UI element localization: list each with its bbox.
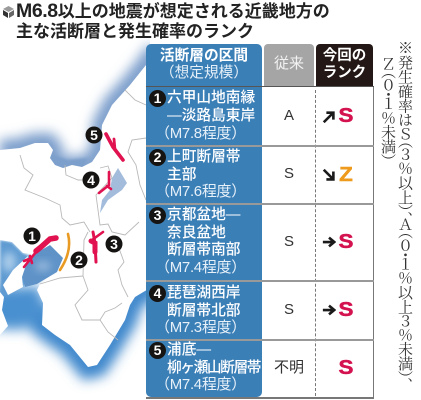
fault 4 xyxy=(99,172,111,193)
table: （M7.8程度） xyxy=(155,125,246,142)
header: 従来: 従来 xyxy=(274,55,304,72)
rank S: S xyxy=(339,231,353,253)
header: 活断層の区間: 活断層の区間 xyxy=(160,48,248,64)
number 2: 2 xyxy=(154,149,161,165)
fault 3 xyxy=(91,232,103,262)
badge 4 xyxy=(82,172,100,188)
Wakasa bay xyxy=(46,152,88,170)
number 2 xyxy=(149,149,166,166)
table right border xyxy=(373,86,374,398)
number 4: 4 xyxy=(154,285,161,301)
table: （M7.4程度） xyxy=(155,376,246,393)
rank S: S xyxy=(339,299,353,321)
Shikoku xyxy=(0,292,8,335)
Osaka bay xyxy=(22,245,63,287)
row 3 name: 京都盆地― xyxy=(167,207,240,223)
arrow down xyxy=(322,168,335,181)
table: ―淡路島東岸 xyxy=(167,108,255,124)
row 5 previous: 不明 xyxy=(274,359,304,376)
header: 活断層の区間: （想定規模） xyxy=(160,65,248,81)
number 1 xyxy=(149,90,166,107)
row 1 previous: A xyxy=(284,107,294,124)
title icon: cube xyxy=(3,6,14,18)
arrow right xyxy=(322,236,336,248)
number 3 xyxy=(149,207,166,224)
row 3 previous: S xyxy=(284,233,294,250)
arrow right xyxy=(322,304,336,316)
row 2 name: 上町断層帯 xyxy=(167,149,240,165)
title xyxy=(16,0,330,41)
badge 1: 1 xyxy=(28,228,36,244)
row 4 previous: S xyxy=(284,301,294,318)
table bottom border xyxy=(146,397,374,398)
badge 4: 4 xyxy=(87,172,95,188)
rank Z: Z xyxy=(339,164,353,186)
header: 今回のランク: ランク xyxy=(323,65,366,81)
number 3: 3 xyxy=(154,207,161,223)
badge 2: 2 xyxy=(75,252,83,268)
rank S: S xyxy=(339,357,353,379)
badge 5: 5 xyxy=(90,127,98,143)
footnote, second column: Ｚ（ ０・ １％未満） xyxy=(379,57,395,160)
row 2 previous: S xyxy=(284,165,294,182)
dashed column divider xyxy=(315,90,316,396)
badge 3 xyxy=(106,236,122,252)
rank S: S xyxy=(339,105,353,127)
Awaji island xyxy=(3,256,28,295)
row 5 name: 浦底― xyxy=(167,342,211,358)
row 1 name: 六甲山地南縁 xyxy=(167,90,255,106)
panel: blue section column xyxy=(146,44,262,397)
table: 奈良盆地 xyxy=(167,225,226,241)
badge 5 xyxy=(86,126,102,144)
badge 2 xyxy=(70,252,88,268)
table: （M7.4程度） xyxy=(155,259,246,276)
sea glow along the coast xyxy=(0,50,156,367)
number 1: 1 xyxy=(154,90,161,106)
row 4 name: 琵琶湖西岸 xyxy=(167,285,240,301)
header: 今回のランク xyxy=(316,44,373,86)
title: M6.8以上の地震が想定される近畿地方の xyxy=(16,0,330,22)
fault 5 xyxy=(106,134,123,160)
table: 主部 xyxy=(167,167,196,183)
Lake Biwa xyxy=(100,168,127,213)
badge 3: 3 xyxy=(110,236,118,252)
header: 従来 xyxy=(264,44,314,86)
Harima sea xyxy=(0,240,33,295)
prefecture borders xyxy=(20,90,146,340)
footnote, first column: ※発生確率はＳ（３％以上）、Ａ（ ０・ １％以上３％未満）、 xyxy=(396,40,412,384)
fault 1 xyxy=(24,238,56,267)
table: 柳ヶ瀬山断層帯 xyxy=(167,360,260,376)
title: 主な活断層と発生確率のランク xyxy=(16,22,254,41)
header: 今回のランク: 今回の xyxy=(323,48,366,64)
map of Kinki region xyxy=(0,39,150,390)
table: 断層帯北部 xyxy=(167,303,240,319)
table: （M7.3程度） xyxy=(155,319,246,336)
table: （M7.6程度） xyxy=(155,183,246,200)
header: 活断層の区間 xyxy=(160,47,248,81)
fault 2 xyxy=(60,234,69,270)
land xyxy=(0,60,150,367)
badge 1 xyxy=(24,228,40,244)
table: 断層帯南部 xyxy=(167,242,240,258)
number 5: 5 xyxy=(154,342,161,358)
arrow up xyxy=(322,111,335,124)
number 5 xyxy=(149,342,166,359)
number 4 xyxy=(149,285,166,302)
